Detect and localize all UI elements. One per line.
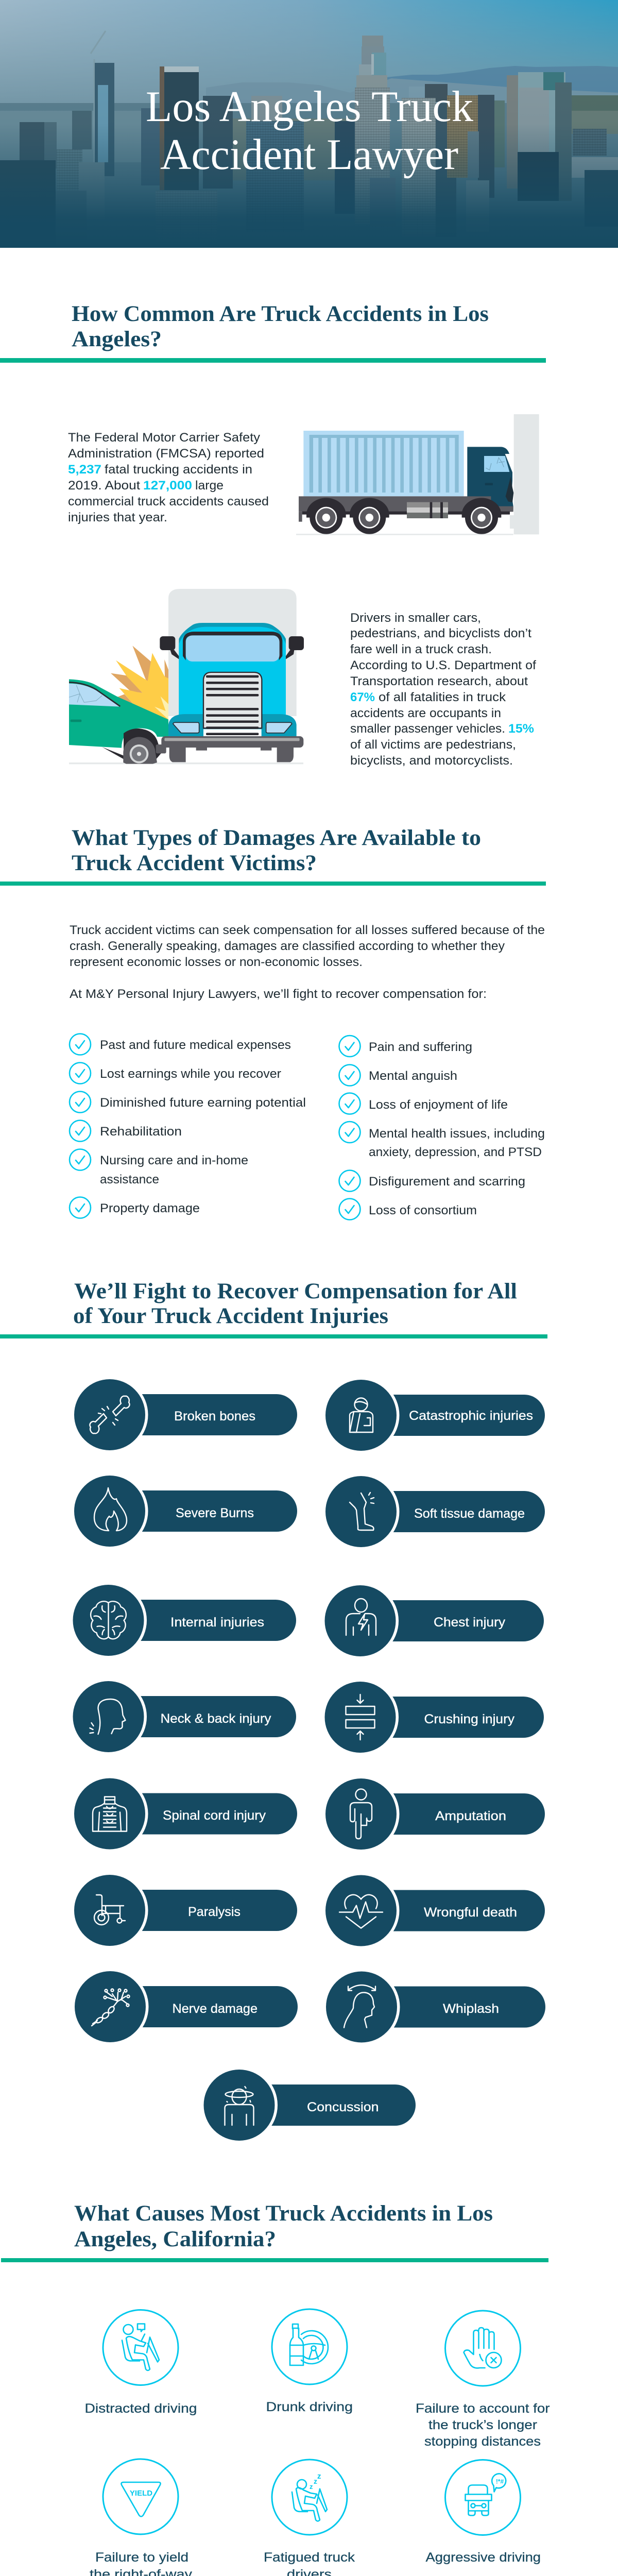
cause: failure to yield <box>90 2459 193 2576</box>
cause: distracted driving: Distracted driving <box>84 2401 197 2416</box>
heading: damages <box>0 826 546 886</box>
text block: fatalities statistics: pedestrians, and bicyclists don’t <box>350 626 531 640</box>
text block: fatalities statistics: bicyclists, and motorcyclists. <box>350 754 513 768</box>
text block: fatalities statistics: Drivers in smaller cars, <box>350 611 481 625</box>
icon: bottle and steering wheel <box>290 2324 328 2365</box>
checklist: non-economic damages: Mental anguish <box>369 1069 457 1083</box>
text block: damages intro: crash. Generally speaking, damages are classified according to whether they <box>70 939 505 953</box>
icon: injured leg <box>350 1493 374 1530</box>
icon: dizzy person <box>225 2087 253 2125</box>
panel: chest injury: Chest injury <box>434 1615 506 1630</box>
text block: fatalities statistics: smaller passenger vehicles. <box>350 722 505 736</box>
panel: soft tissue damage <box>322 1473 545 1550</box>
cause: failure to account for stopping distances <box>416 2311 550 2449</box>
icon: injured person with sling <box>350 1398 373 1432</box>
cause: failure to account for stopping distances: the truck’s longer <box>428 2418 537 2432</box>
heading: causes: Angeles, California? <box>74 2227 276 2251</box>
panel: concussion: Concussion <box>307 2100 379 2114</box>
checklist: non-economic damages: Disfigurement and scarring <box>369 1175 525 1189</box>
icon: sleeping driver: z <box>317 2472 321 2481</box>
icon: wheelchair <box>94 1895 125 1925</box>
skyline towers <box>0 31 618 248</box>
checklist: non-economic damages: anxiety, depression, and PTSD <box>369 1145 542 1159</box>
icon: hand with x <box>464 2328 502 2368</box>
text block: FMCSA statistics: The Federal Motor Carrier Safety <box>68 431 260 445</box>
text block: fatalities statistics <box>350 611 536 768</box>
icon: flame <box>94 1488 127 1531</box>
text block: FMCSA statistics: Administration (FMCSA) reported <box>68 447 264 461</box>
heading: how common: How Common Are Truck Accidents in Los <box>72 302 489 326</box>
panel: severe burns: Severe Burns <box>176 1506 254 1520</box>
heading: injuries <box>0 1279 547 1338</box>
text block: damages intro <box>70 923 545 1001</box>
text block: fatalities statistics: fare well in a truck crash. <box>350 642 492 656</box>
icon: yield sign: YIELD <box>130 2489 152 2498</box>
heading: how common <box>0 302 546 363</box>
icon: crushing arrows and plates <box>346 1694 375 1740</box>
checklist: economic damages: Diminished future earning potential <box>100 1096 306 1110</box>
icon: driver on phone <box>122 2324 159 2370</box>
panel: spinal cord injury <box>71 1775 297 1852</box>
checklist: economic damages: assistance <box>100 1173 159 1187</box>
text block: fatalities statistics: of all fatalities in truck <box>379 690 506 704</box>
panel: catastrophic injuries <box>322 1377 545 1454</box>
panel: amputation <box>322 1775 545 1853</box>
panel: soft tissue damage: Soft tissue damage <box>414 1506 525 1521</box>
icon: head profile <box>90 1699 126 1734</box>
icon: yield sign <box>122 2482 161 2516</box>
illustration: truck hitting car <box>69 589 304 764</box>
checklist: economic damages: Past and future medical expenses <box>100 1038 291 1052</box>
checklist: non-economic damages <box>339 1036 545 1220</box>
hero: Los Angeles skyline banner <box>0 0 618 248</box>
heading: damages: Truck Accident Victims? <box>72 851 317 875</box>
panel: broken bones: Broken bones <box>174 1409 255 1423</box>
panel: chest injury <box>322 1583 544 1659</box>
cause: drunk driving <box>266 2309 353 2414</box>
icon: sleeping driver: z <box>310 2483 313 2490</box>
panel: wrongful death: Wrongful death <box>424 1905 517 1920</box>
icon: brain <box>91 1601 126 1639</box>
checklist: economic damages <box>70 1033 306 1218</box>
icon: nerve cell <box>92 1989 130 2026</box>
panel: neck and back injury <box>70 1679 296 1755</box>
panel: nerve damage <box>72 1968 298 2045</box>
panel: broken bones <box>71 1377 297 1453</box>
panel: crushing injury <box>322 1679 544 1756</box>
icon: truck with angry speech bubble <box>466 2473 506 2515</box>
heading: causes: What Causes Most Truck Accidents in Los <box>74 2201 493 2226</box>
text block: fatalities statistics: accidents are occupants in <box>350 706 501 720</box>
cause: failure to account for stopping distances: stopping distances <box>424 2434 541 2449</box>
cause: aggressive driving <box>425 2460 541 2565</box>
icon: truck with angry speech bubble: !*# <box>496 2478 504 2485</box>
text block: FMCSA statistics: commercial truck accidents caused <box>68 495 269 509</box>
panel: internal injuries <box>70 1582 296 1659</box>
heading: how common: Angeles? <box>72 327 162 351</box>
text block: fatalities statistics: 15% <box>508 722 534 736</box>
panel: severe burns <box>71 1472 297 1550</box>
panel: amputation: Amputation <box>435 1809 506 1823</box>
heading: injuries: of Your Truck Accident Injuries <box>73 1304 388 1328</box>
panel: paralysis: Paralysis <box>188 1905 241 1919</box>
checklist: economic damages: Rehabilitation <box>100 1125 182 1139</box>
checklist: economic damages: Property damage <box>100 1201 200 1215</box>
panel: wrongful death <box>322 1872 545 1949</box>
text block: fatalities statistics: According to U.S. Department of <box>350 658 536 672</box>
checklist: non-economic damages: Pain and suffering <box>369 1040 472 1054</box>
icon: torso and spine <box>93 1797 127 1831</box>
icon: chest with lightning bolt <box>346 1599 376 1635</box>
title: Accident Lawyer <box>160 130 458 179</box>
cause: failure to account for stopping distances: Failure to account for <box>416 2401 550 2416</box>
cause: fatigued truck drivers: Fatigued truck <box>264 2550 355 2565</box>
cause: failure to yield: Failure to yield <box>95 2550 188 2565</box>
panel: catastrophic injuries: Catastrophic injuries <box>409 1409 533 1423</box>
icon: broken bone <box>90 1396 130 1433</box>
panel: paralysis <box>71 1872 297 1948</box>
text block: fatalities statistics: 67% <box>350 690 375 704</box>
text block: fatalities statistics: of all victims are pedestrians, <box>350 738 516 752</box>
icon: heart with pulse line <box>339 1895 383 1928</box>
text block: FMCSA statistics: fatal trucking accidents in <box>105 463 252 477</box>
text block: damages intro: represent economic losses or non-economic losses. <box>70 955 363 969</box>
panel: nerve damage: Nerve damage <box>172 2002 258 2016</box>
illustration: truck crashed into wall <box>296 414 539 535</box>
panel: spinal cord injury: Spinal cord injury <box>163 1808 266 1823</box>
text block: fatalities statistics: Transportation research, about <box>350 674 528 688</box>
icon: person with missing limb <box>350 1789 372 1839</box>
panel: concussion <box>201 2067 416 2143</box>
cause: fatigued truck drivers <box>264 2460 355 2576</box>
icon: sleeping driver <box>292 2472 327 2521</box>
text block: FMCSA statistics: injuries that year. <box>68 511 167 524</box>
checklist: non-economic damages: Loss of consortium <box>369 1204 477 1217</box>
icon: sleeping driver: z <box>314 2477 317 2485</box>
title <box>146 82 473 179</box>
icon: head with motion arrow <box>344 1985 375 2028</box>
text block: FMCSA statistics <box>68 431 269 524</box>
cause: drunk driving: Drunk driving <box>266 2400 353 2414</box>
checklist: economic damages: Nursing care and in-home <box>100 1154 248 1167</box>
panel: neck and back injury: Neck & back injury <box>161 1711 271 1726</box>
text block: FMCSA statistics: large <box>195 479 224 493</box>
checklist: non-economic damages: Loss of enjoyment of life <box>369 1098 508 1112</box>
panel: crushing injury: Crushing injury <box>424 1712 515 1726</box>
text block: FMCSA statistics: 5,237 <box>68 463 101 477</box>
heading: causes <box>1 2201 548 2262</box>
text block: damages intro: At M&Y Personal Injury Lawyers, we’ll fight to recover compensation for: <box>70 987 487 1001</box>
text block: FMCSA statistics: 127,000 <box>143 479 192 493</box>
heading: injuries: We’ll Fight to Recover Compensation for All <box>74 1279 517 1303</box>
text block: damages intro: Truck accident victims can seek compensation for all losses suffered because of the <box>70 923 545 937</box>
title: Los Angeles Truck <box>146 82 473 131</box>
cause: aggressive driving: Aggressive driving <box>425 2550 541 2565</box>
heading: damages: What Types of Damages Are Available to <box>72 826 481 850</box>
panel: internal injuries: Internal injuries <box>170 1615 264 1630</box>
checklist: non-economic damages: Mental health issues, including <box>369 1127 545 1141</box>
panel: whiplash: Whiplash <box>443 2002 499 2016</box>
text block: FMCSA statistics: 2019. About <box>68 479 140 493</box>
panel: whiplash <box>323 1969 545 2045</box>
cause: distracted driving <box>84 2310 197 2416</box>
checklist: economic damages: Lost earnings while you recover <box>100 1067 281 1081</box>
